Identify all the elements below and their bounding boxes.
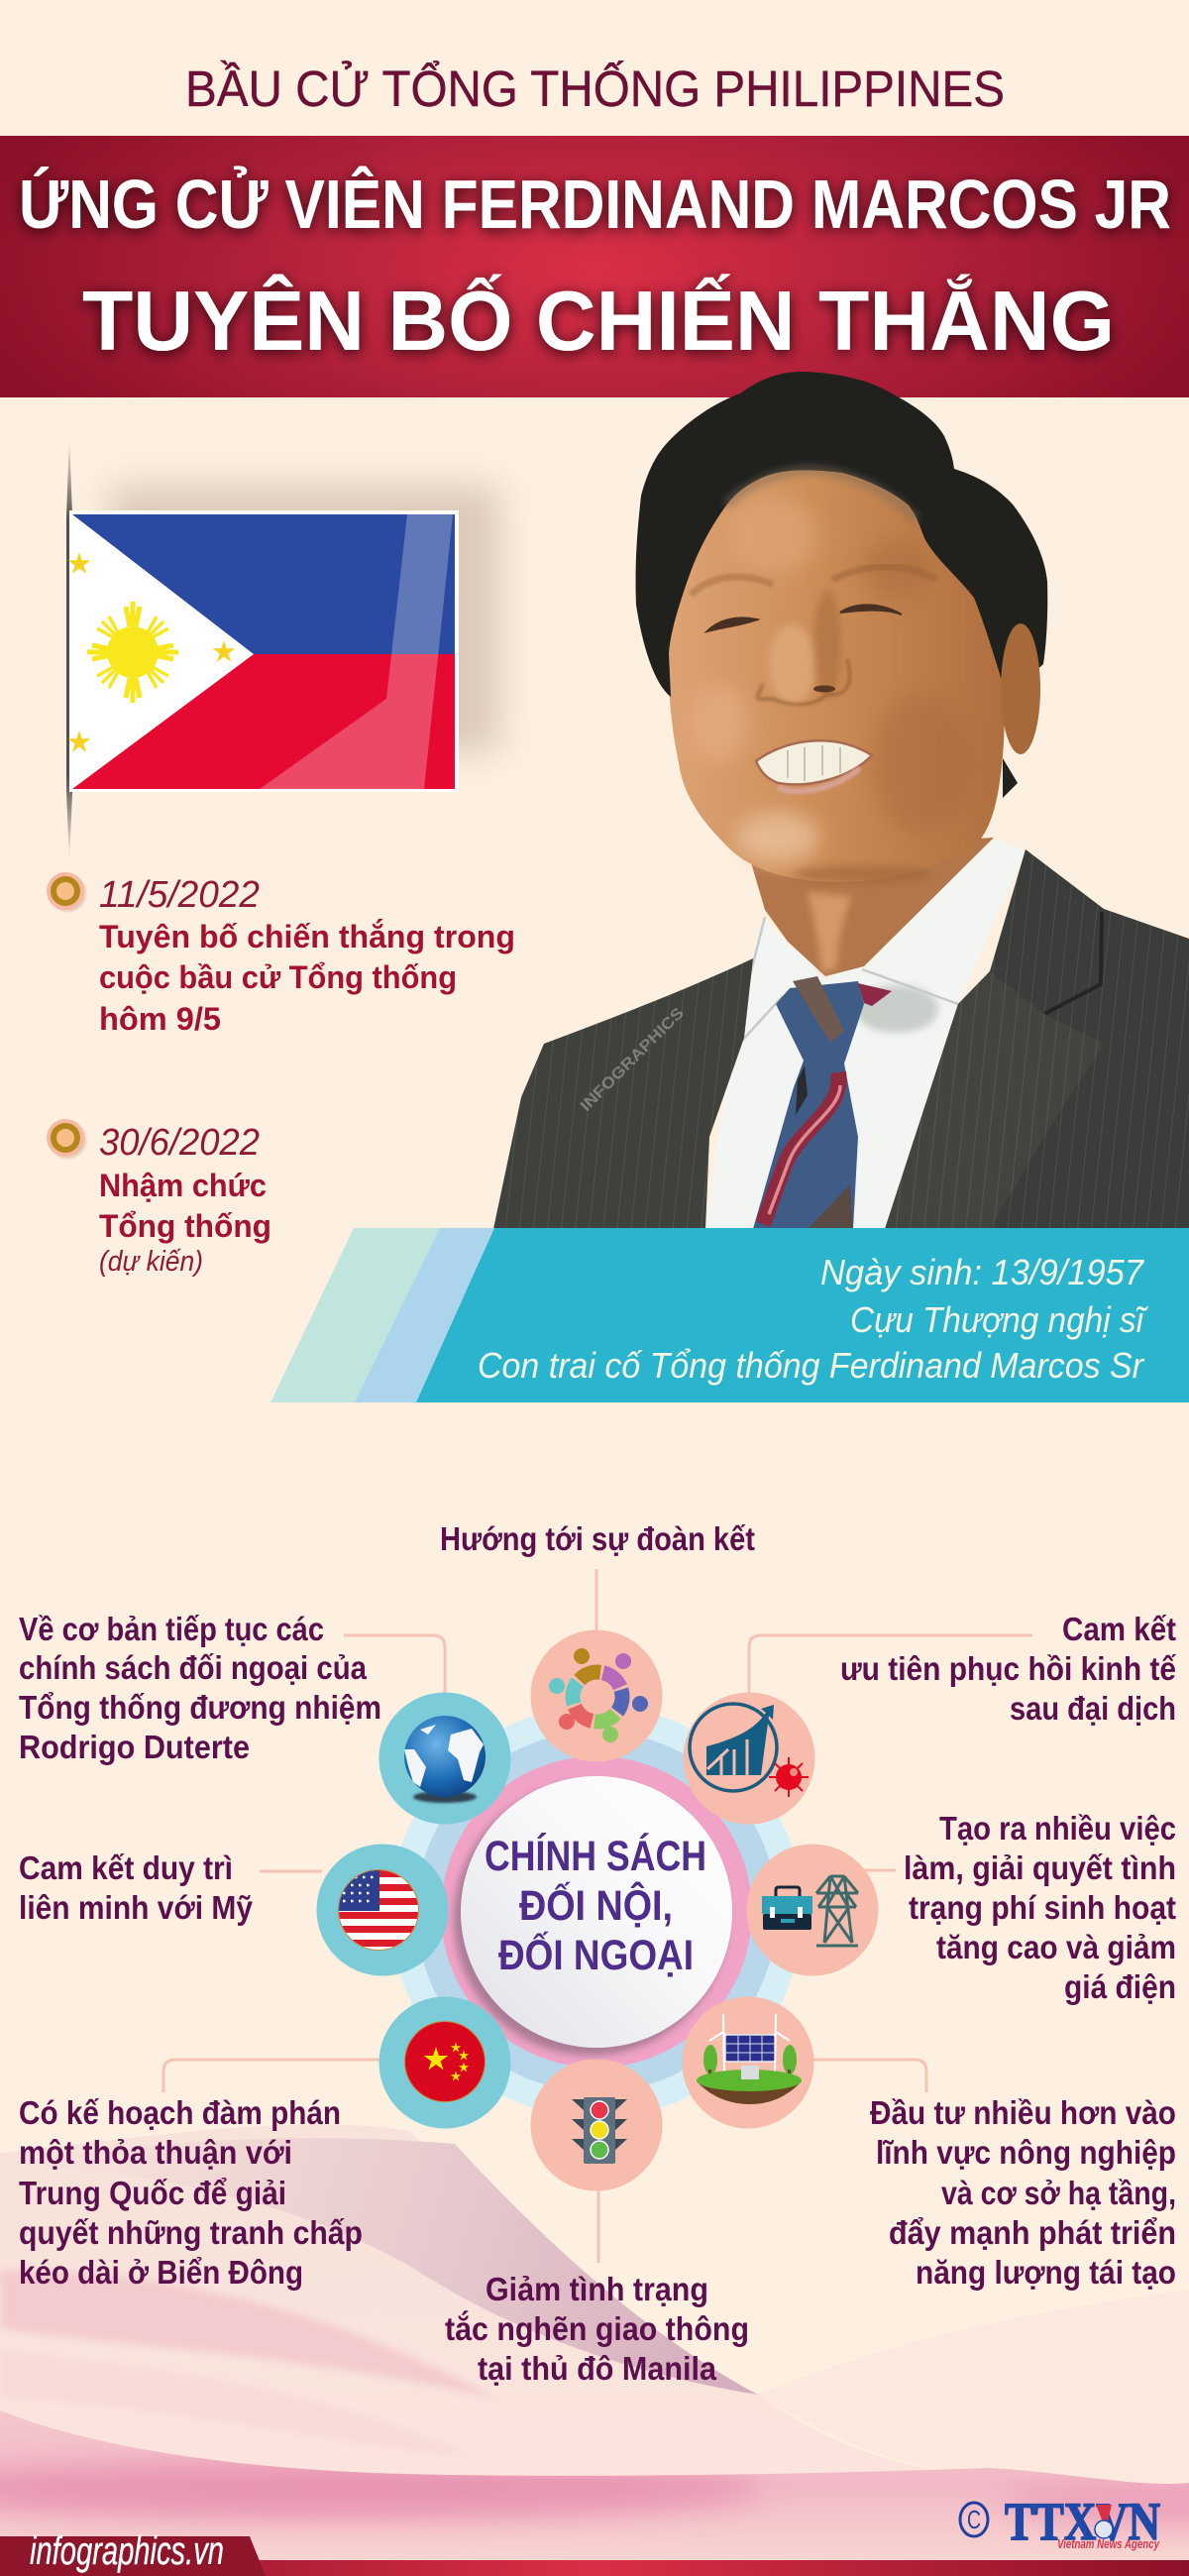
date block 2: (dự kiến) [99,1246,203,1278]
icon: globe [378,1693,511,1824]
turbines [709,2014,790,2072]
text: foreign policy: Rodrigo Duterte [19,1729,250,1765]
text: traffic: tắc nghẽn giao thông [445,2310,749,2347]
description: Nhậm chức [99,1168,267,1203]
text: unity: Hướng tới sự đoàn kết [440,1520,755,1557]
hub title: ĐỐI NỘI, [519,1881,673,1930]
text: economic recovery [840,1611,1177,1727]
icon: jobs and electricity [747,1844,878,1976]
trees [703,2045,717,2074]
bullet [47,872,86,912]
suit right [885,849,1189,1229]
info ribbon: Cựu Thượng nghị sĩ [850,1299,1149,1340]
collar edges [730,917,958,1054]
hub rings [390,1706,803,2118]
hub centre [461,1776,732,2048]
text: China talks: quyết những tranh chấp [19,2214,363,2251]
text: foreign policy: chính sách đối ngoại của [19,1649,368,1686]
suit left [493,958,753,1229]
power tower [816,1876,858,1946]
banner heading line 2: TUYÊN BỐ CHIẾN THẮNG [82,274,1115,369]
hub title [485,1833,706,1979]
hair [636,372,1047,697]
face shading [689,496,971,883]
portrait of Ferdinand Marcos Jr [493,372,1189,1229]
icon: USA flag [317,1844,448,1976]
text: China talks [19,2094,363,2291]
text: traffic: Giảm tình trạng [486,2271,708,2307]
nose [758,659,850,705]
flag of the Philippines [66,436,500,860]
connector lines [163,1569,1032,2263]
island [697,2071,802,2104]
watermark: INFOGRAPHICS [578,1005,688,1115]
background waves [0,2124,1189,2576]
logo: TTXVN [960,2492,1160,2551]
date block 2 [47,1119,271,1278]
title: BẦU CỬ TỔNG THỐNG PHILIPPINES [185,59,1005,117]
date block 1 [47,872,515,1037]
briefcase [762,1887,812,1930]
policy hub [390,1706,803,2118]
hub title: ĐỐI NGOẠI [498,1931,694,1979]
hairline streak [726,470,917,520]
text: US alliance: liên minh với Mỹ [19,1889,254,1926]
icon: unity [531,1629,662,1762]
mouth [756,740,872,784]
logo: TTXVN: TTXVN [1005,2492,1160,2551]
date block 2: Tổng thống [99,1208,271,1244]
shirt [705,840,1026,1229]
info ribbon [270,1228,1189,1402]
ear [1001,623,1040,754]
tie [753,976,892,1229]
text: China talks: kéo dài ở Biển Đông [19,2254,303,2291]
ribbon text: Ngày sinh: 13/9/1957 [820,1252,1145,1292]
text: jobs and prices: giá điện [1064,1968,1176,2005]
text: China talks: Trung Quốc để giải [19,2175,286,2211]
date block 1: hôm 9/5 [99,1001,221,1037]
date: 11/5/2022 [99,874,260,916]
text: traffic: tại thủ đô Manila [478,2350,717,2387]
text: China talks: Có kế hoạch đàm phán [19,2094,341,2131]
virus [769,1757,809,1797]
footer tab [0,2529,266,2576]
text: foreign policy: Tổng thống đương nhiệm [19,1689,381,1726]
flag stars [68,552,235,752]
text: economic recovery: Cam kết [1062,1611,1176,1647]
description: Tuyên bố chiến thắng trong [99,919,515,954]
text: China talks: một thỏa thuận với [19,2134,292,2171]
neck [748,838,994,976]
banner [0,136,1189,397]
website: infographics.vn [30,2529,224,2573]
face [668,456,1005,882]
text: traffic [445,2271,749,2387]
icon: solar and farm [682,1996,814,2129]
date block 1: cuộc bầu cử Tổng thống [99,959,457,995]
bullet [47,1119,86,1159]
icon: economic recovery [684,1693,814,1824]
eyes [705,617,759,632]
icon: traffic light [531,2060,662,2190]
text: jobs and prices [904,1810,1176,2005]
text: US alliance: Cam kết duy trì [19,1849,233,1886]
text: foreign policy: Về cơ bản tiếp tục các [19,1611,324,1647]
date: 30/6/2022 [99,1122,260,1164]
solar panel [741,2066,759,2079]
text: investment [870,2094,1176,2291]
text: US alliance [19,1849,254,1926]
brows [691,577,773,595]
flag sun [87,602,178,703]
icon: China flag [378,1996,511,2129]
sideburn [1003,758,1018,798]
hub title: CHÍNH SÁCH [485,1833,706,1880]
footer bar [0,2560,1189,2576]
info ribbon: Con trai cố Tổng thống Ferdinand Marcos Sr [478,1345,1145,1386]
text: foreign policy [19,1611,381,1765]
logo: TTXVN: C [967,2505,981,2534]
